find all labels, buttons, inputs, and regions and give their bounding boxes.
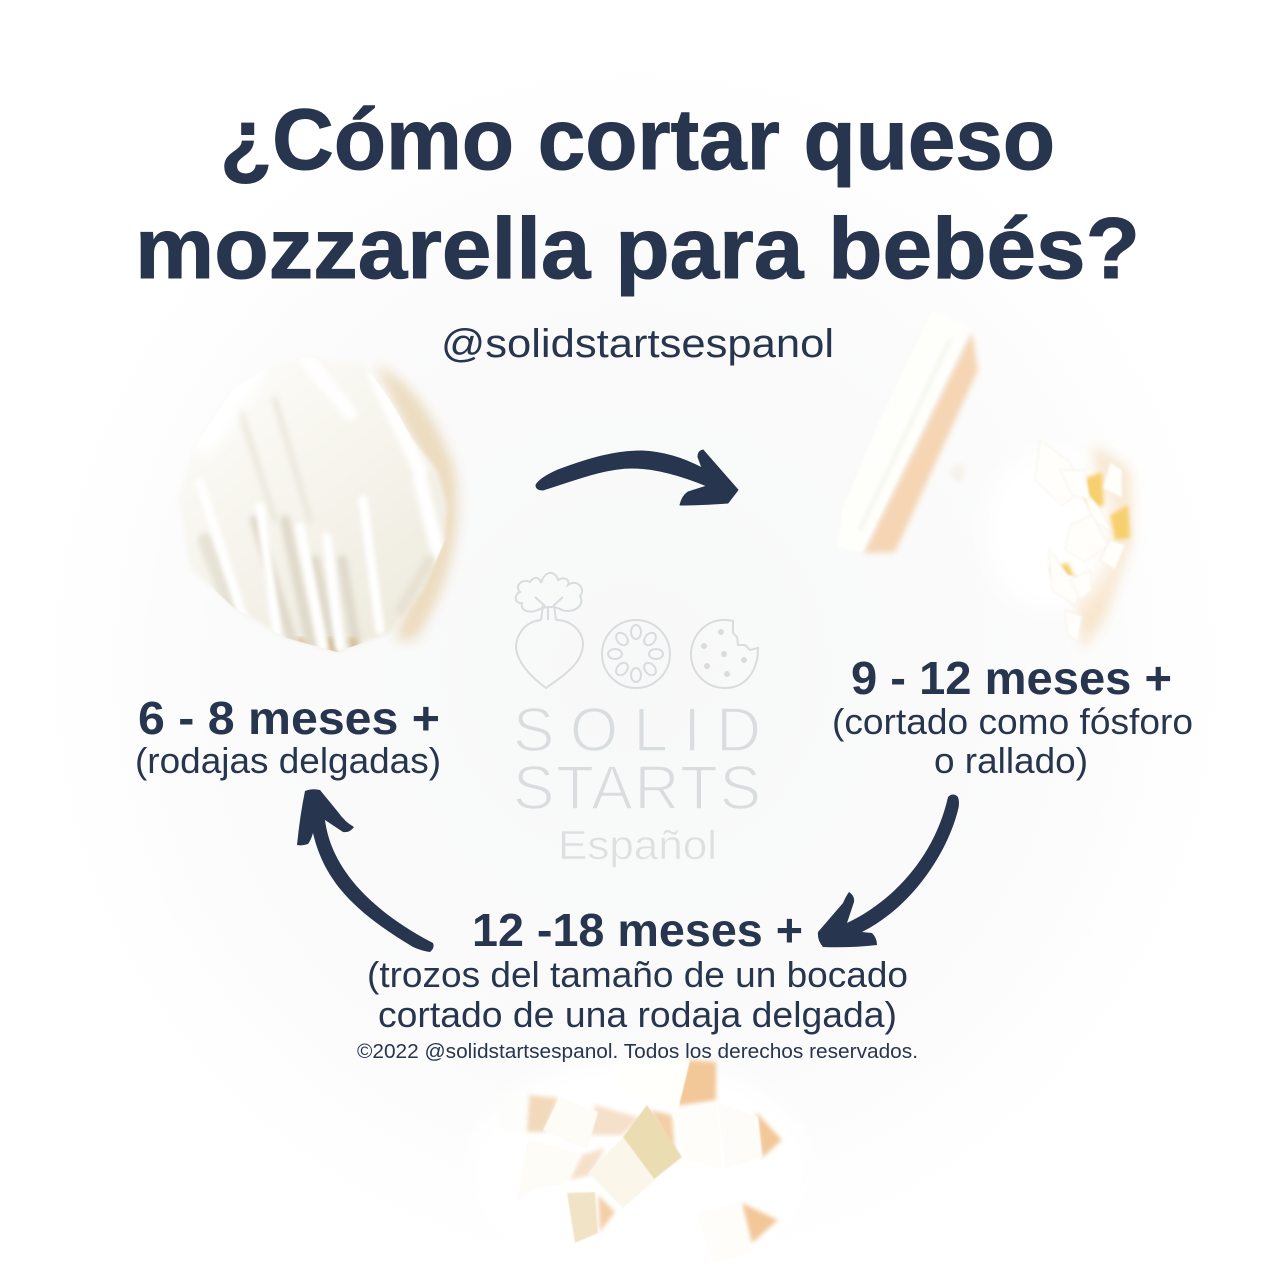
photo: mozzarella stick bbox=[837, 310, 978, 553]
title: ¿Cómo cortar queso bbox=[220, 92, 1055, 188]
photo: mozzarella slice bbox=[178, 357, 458, 655]
label: 6-8 meses: (rodajas delgadas) bbox=[135, 740, 441, 781]
label: 9-12 meses: 9 - 12 meses + bbox=[851, 652, 1172, 704]
label: 6-8 meses: 6 - 8 meses + bbox=[138, 692, 440, 744]
title bbox=[135, 92, 1140, 297]
logo wordmark: Español bbox=[558, 822, 717, 868]
white halo behind cubes bbox=[470, 1060, 810, 1275]
label: 12-18 meses bbox=[367, 904, 908, 1035]
cubes bbox=[498, 1060, 762, 1263]
logo wordmark: SOLID bbox=[513, 696, 761, 765]
title: mozzarella para bebés? bbox=[135, 201, 1140, 297]
arrow: slice to stick bbox=[536, 450, 738, 505]
label: 12-18 meses: (trozos del tamaño de un bocado bbox=[367, 954, 908, 995]
arrow: 12-18 to 6-8 bbox=[297, 789, 434, 952]
label: 9-12 meses: o rallado) bbox=[934, 740, 1088, 781]
label: 12-18 meses: cortado de una rodaja delgada) bbox=[378, 994, 897, 1035]
arrow: 9-12 to 12-18 bbox=[818, 794, 959, 947]
label: 9-12 meses bbox=[832, 652, 1193, 781]
icon: cookie bbox=[691, 620, 758, 688]
photo: mozzarella cubes bbox=[470, 1060, 810, 1275]
label: 12-18 meses: 12 -18 meses + bbox=[472, 904, 803, 956]
copyright: ©2022 @solidstartsespanol. Todos los derechos reservados. bbox=[357, 1041, 918, 1063]
logo wordmark bbox=[513, 696, 761, 868]
label: 9-12 meses: (cortado como fósforo bbox=[832, 701, 1193, 742]
photo: grated mozzarella bbox=[951, 440, 1132, 650]
label: 6-8 meses bbox=[135, 692, 441, 781]
cube shadows bbox=[526, 1060, 782, 1243]
icon: beet bbox=[516, 573, 583, 688]
logo watermark bbox=[513, 573, 761, 868]
logo wordmark: STARTS bbox=[513, 754, 761, 823]
handle: @solidstartsespanol bbox=[441, 322, 834, 366]
icon: cucumber bbox=[602, 620, 670, 688]
